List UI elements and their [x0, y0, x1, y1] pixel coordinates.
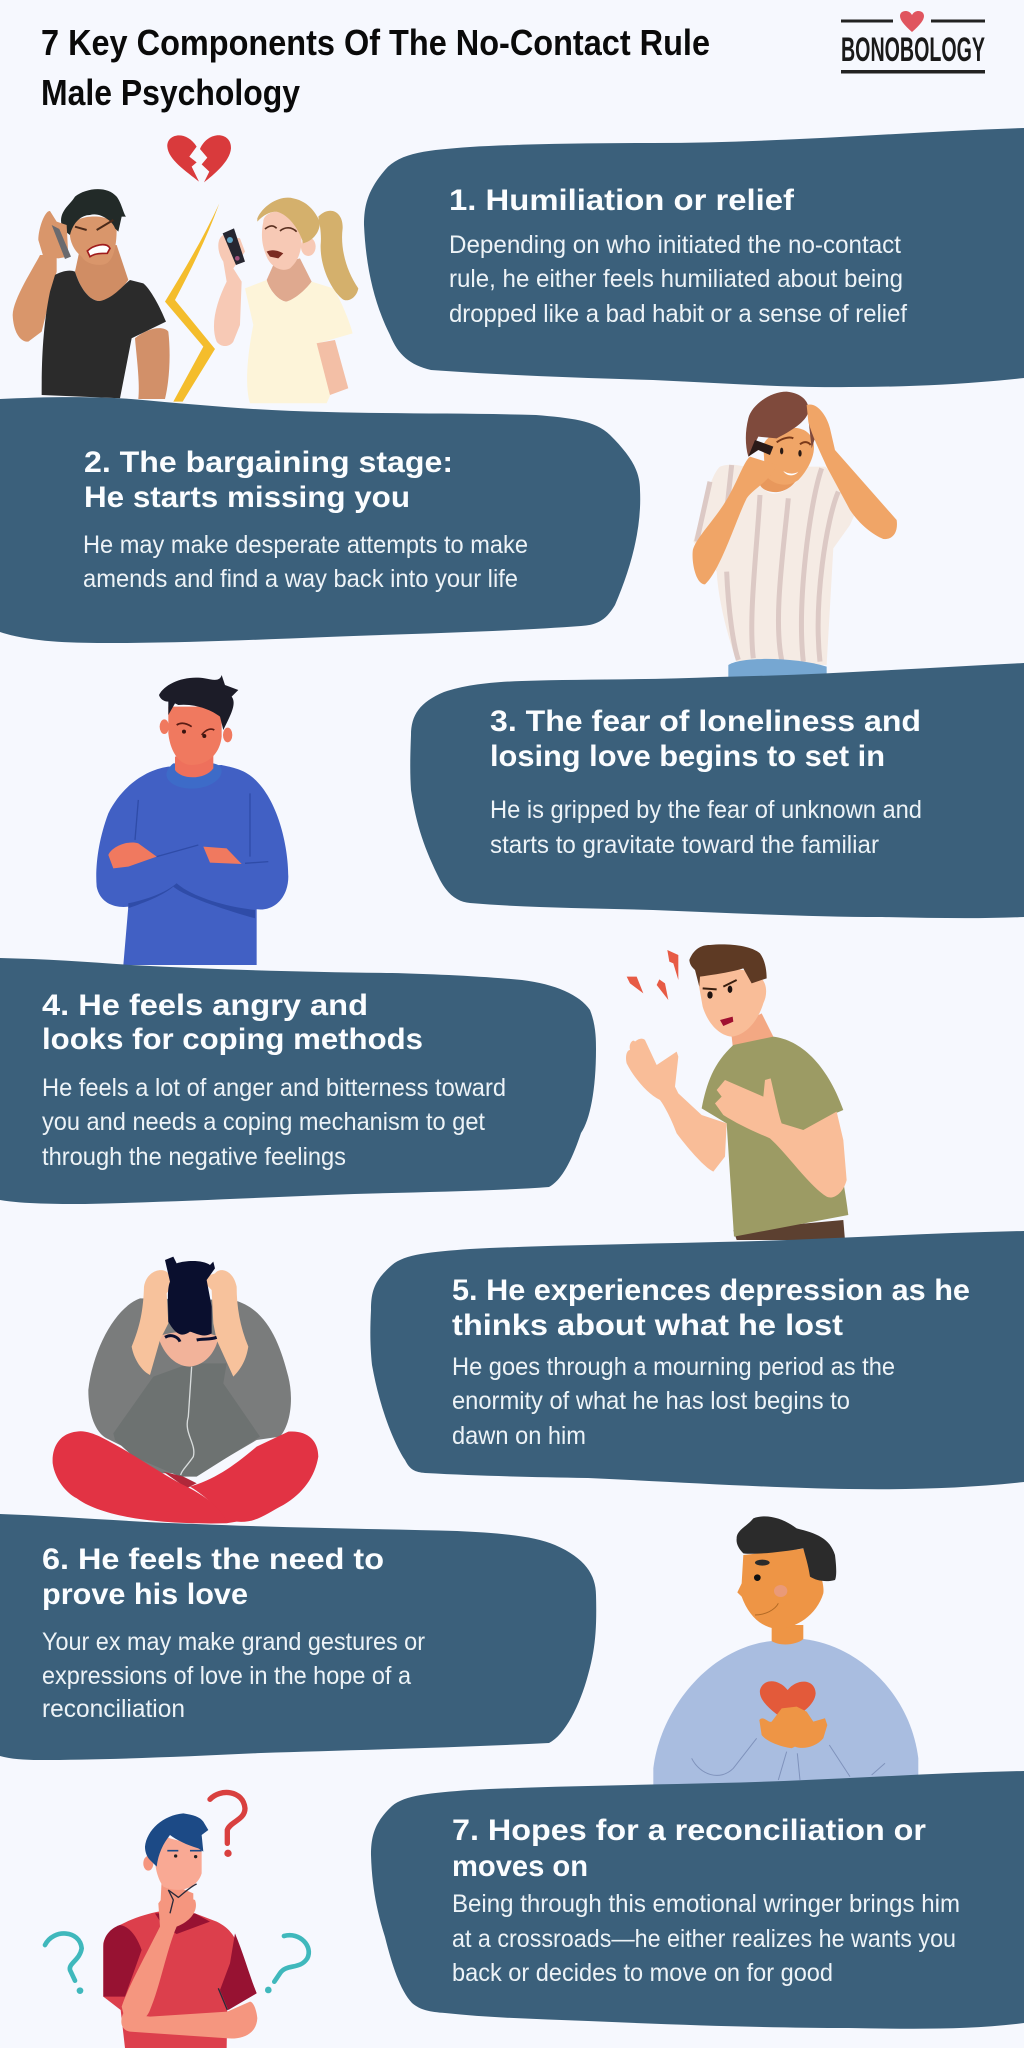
- panel 7: reconciliation or moves on: Being through this emotional wringer brings him: [452, 1890, 960, 1918]
- panel 3: fear of loneliness: starts to gravitate toward the familiar: [490, 831, 879, 859]
- panel 1: humiliation or relief: dropped like a bad habit or a sense of relief: [449, 300, 907, 328]
- illustration: sad man in blue sweater: [96, 675, 288, 965]
- panel 4: angry, coping methods: you and needs a coping mechanism to get: [42, 1108, 485, 1136]
- panel 5: depression: [370, 1231, 1024, 1489]
- panel 3: fear of loneliness: 3. The fear of loneliness and: [490, 705, 921, 738]
- title: Male Psychology: [41, 72, 300, 113]
- panel 6: prove his love: reconciliation: [42, 1695, 185, 1723]
- illustration: angry man in olive shirt: [626, 944, 848, 1240]
- illustration: arguing couple with broken heart: [13, 135, 358, 403]
- panel 7: reconciliation or moves on: at a crossroads—he either realizes he wants you: [452, 1925, 956, 1953]
- panel 1: humiliation or relief: rule, he either feels humiliated about being: [449, 265, 903, 293]
- panel 2: the bargaining stage: [0, 397, 640, 643]
- panel 2: the bargaining stage: 2. The bargaining stage:: [84, 446, 453, 479]
- panel 5: depression: dawn on him: [452, 1422, 586, 1450]
- panel 7: reconciliation or moves on: back or decides to move on for good: [452, 1959, 833, 1987]
- title: 7 Key Components Of The No-Contact Rule: [41, 22, 710, 63]
- panel 7: reconciliation or moves on: 7. Hopes for a reconciliation or: [452, 1814, 926, 1847]
- panel 1: humiliation or relief: 1. Humiliation or relief: [449, 184, 795, 217]
- panel 6: prove his love: prove his love: [42, 1578, 248, 1611]
- illustration: depressed man holding head: [53, 1257, 318, 1523]
- panel 2: the bargaining stage: He may make desperate attempts to make: [83, 531, 528, 559]
- panel 3: fear of loneliness: He is gripped by the fear of unknown and: [490, 796, 922, 824]
- panel 6: prove his love: 6. He feels the need to: [42, 1543, 384, 1576]
- panel 5: depression: 5. He experiences depression as he: [452, 1274, 970, 1307]
- panel 5: depression: enormity of what he has lost begins to: [452, 1387, 850, 1415]
- panel 4: angry, coping methods: He feels a lot of anger and bitterness toward: [42, 1074, 506, 1102]
- illustration: thinking man with question marks: [45, 1792, 309, 2048]
- title: [41, 22, 710, 113]
- logo: Bonobology: [841, 11, 985, 73]
- panel 4: angry, coping methods: 4. He feels angry and: [42, 989, 368, 1022]
- illustration: man holding heart: [653, 1516, 918, 1792]
- panel 5: depression: He goes through a mourning period as the: [452, 1353, 895, 1381]
- panel 1: humiliation or relief: [364, 128, 1024, 387]
- panel 1: humiliation or relief: Depending on who initiated the no-contact: [449, 231, 901, 259]
- illustration: distressed man in striped shirt: [693, 392, 897, 678]
- panel 2: the bargaining stage: He starts missing you: [84, 481, 410, 514]
- panel 5: depression: thinks about what he lost: [452, 1309, 843, 1342]
- panel 3: fear of loneliness: [410, 663, 1024, 918]
- panel 2: the bargaining stage: amends and find a way back into your life: [83, 565, 518, 593]
- panel 3: fear of loneliness: losing love begins to set in: [490, 740, 885, 773]
- panel 4: angry, coping methods: [0, 958, 596, 1204]
- panel 6: prove his love: [0, 1514, 596, 1760]
- panel 7: reconciliation or moves on: moves on: [452, 1850, 588, 1883]
- panel 4: angry, coping methods: looks for coping methods: [42, 1023, 423, 1056]
- panel 4: angry, coping methods: through the negative feelings: [42, 1143, 346, 1171]
- panel 7: reconciliation or moves on: [371, 1771, 1024, 2029]
- panel 6: prove his love: expressions of love in the hope of a: [42, 1662, 411, 1690]
- panel 6: prove his love: Your ex may make grand gestures or: [42, 1628, 425, 1656]
